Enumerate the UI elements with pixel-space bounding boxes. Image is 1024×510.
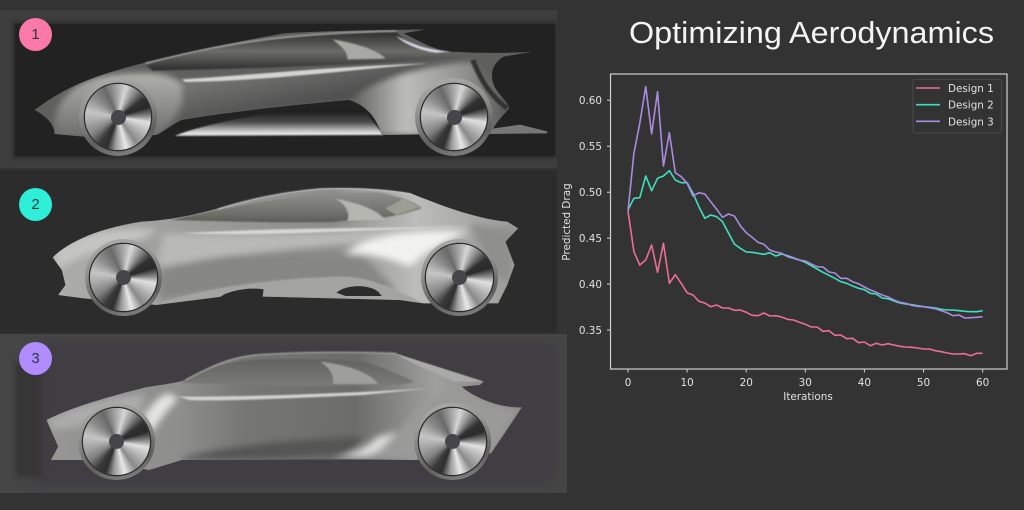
y axis ticks and labels — [579, 95, 610, 337]
badge 1 — [19, 18, 52, 51]
series: Design 2 — [628, 171, 983, 312]
hub — [109, 434, 124, 449]
wheel: design 3 front — [78, 403, 155, 480]
dark backdrop of design 1 — [15, 24, 555, 156]
car body: design 1 — [34, 29, 548, 137]
y axis ticks and labels: 0.35 — [579, 325, 602, 337]
x axis ticks and labels: 10 — [680, 377, 694, 389]
rim — [83, 408, 150, 475]
x axis ticks and labels: 60 — [976, 377, 989, 389]
line chart: predicted drag over iterations — [561, 74, 1007, 403]
rim — [421, 84, 487, 150]
badge 1: 1 — [31, 26, 40, 43]
wheel: design 2 rear — [421, 239, 498, 316]
hub — [446, 110, 462, 124]
hub — [116, 270, 131, 285]
x axis title: Iterations — [783, 391, 833, 403]
car body: design 2 — [52, 187, 518, 305]
rim — [419, 408, 486, 475]
plot frame — [610, 74, 1007, 369]
y axis ticks and labels: 0.55 — [579, 141, 602, 153]
badge 3: 3 — [31, 350, 40, 367]
legend entry: Design 1: Design 1 — [948, 83, 994, 95]
x axis ticks and labels: 20 — [740, 377, 753, 389]
x axis ticks and labels — [625, 369, 989, 389]
hub — [445, 434, 460, 449]
legend entry: Design 2: Design 2 — [948, 100, 994, 112]
panel: design 2 car — [19, 187, 518, 316]
wheel: design 2 front — [85, 239, 162, 316]
y axis title: Predicted Drag — [561, 183, 573, 261]
panel: design 3 car — [0, 334, 567, 493]
x axis ticks and labels: 30 — [799, 377, 812, 389]
y axis ticks and labels: 0.45 — [579, 233, 602, 245]
y axis ticks and labels: 0.60 — [579, 95, 602, 107]
y axis ticks and labels: 0.40 — [579, 279, 602, 291]
car body: design 3 — [46, 350, 522, 470]
badge 3 — [19, 342, 52, 375]
panel: design 1 car — [0, 10, 557, 168]
wheel: design 1 front — [79, 78, 157, 156]
wheel: design 1 rear — [415, 78, 493, 156]
x axis ticks and labels: 50 — [917, 377, 930, 389]
rim — [85, 84, 151, 150]
legend — [913, 80, 1002, 133]
y axis ticks and labels: 0.50 — [579, 187, 602, 199]
series: Design 3 — [628, 87, 983, 318]
hub — [452, 270, 467, 285]
series lines — [628, 87, 983, 356]
badge 2 — [19, 188, 52, 221]
dark strip at left of design 3 — [18, 364, 38, 474]
x axis ticks and labels: 0 — [625, 377, 631, 389]
series: Design 1 — [628, 211, 983, 356]
rim — [90, 244, 157, 311]
legend entry: Design 3: Design 3 — [948, 116, 994, 128]
wheel: design 3 rear — [414, 403, 491, 480]
dim backdrop of design 3 — [40, 348, 550, 478]
x axis ticks and labels: 40 — [858, 377, 871, 389]
hub — [110, 110, 126, 124]
rim — [426, 244, 493, 311]
title: Optimizing Aerodynamics — [629, 16, 994, 50]
badge 2: 2 — [31, 196, 40, 213]
